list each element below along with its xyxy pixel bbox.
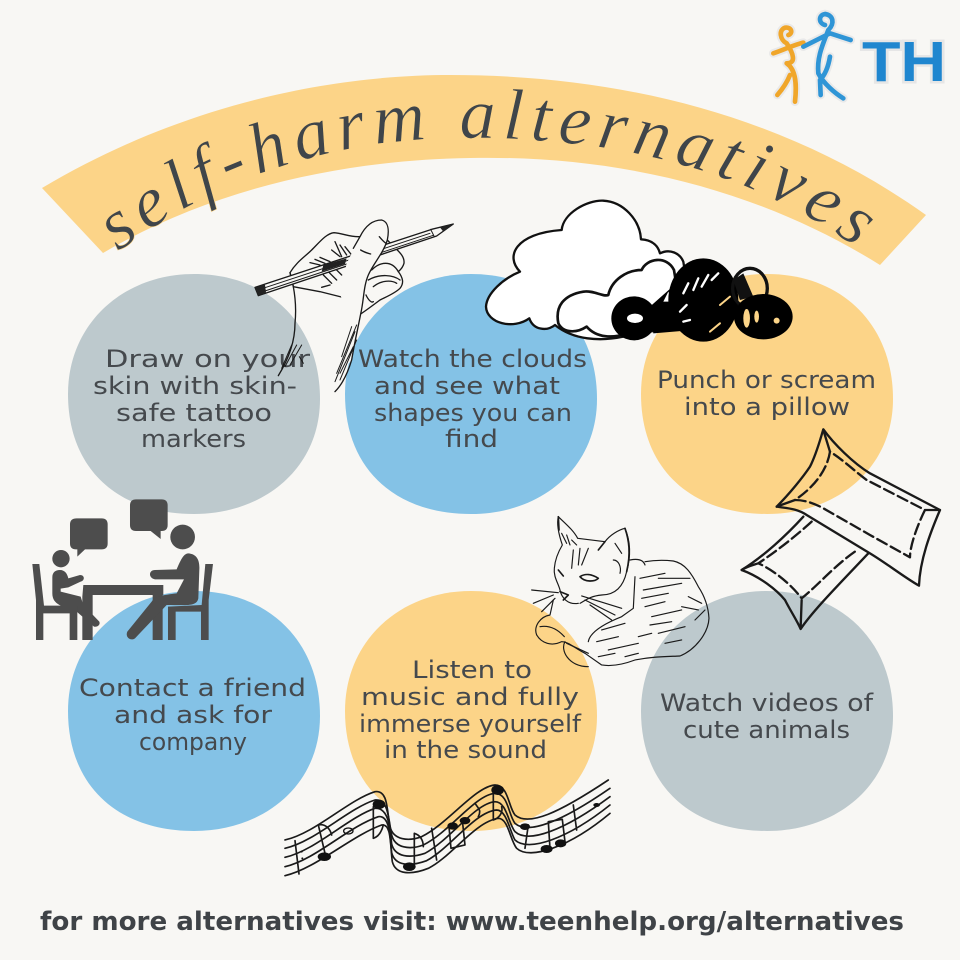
panel: draw on skin: safe tattoo: [116, 399, 272, 427]
panel: listen to music: immerse yourself: [359, 710, 582, 738]
icon: music staff: [285, 780, 610, 876]
panel: watch animal videos: [641, 591, 893, 831]
panel: listen to music: in the sound: [384, 736, 547, 764]
icon: hand holding pencil: [255, 220, 453, 392]
person right: [127, 525, 199, 639]
logo: TH: [773, 14, 946, 102]
icon: clouds with scribble: [486, 201, 793, 342]
panel: punch or scream: into a pillow: [684, 393, 850, 421]
panel: watch animal videos: cute animals: [683, 716, 850, 744]
footer link: for more alternatives visit: www.teenhelp.org/alternatives: [40, 907, 904, 937]
speech bubble right: [130, 499, 168, 539]
panel: punch or scream: [641, 274, 893, 514]
table: [82, 585, 163, 640]
panel: draw on skin: Draw on your: [105, 345, 310, 373]
icon: two people talking at a table: [32, 499, 213, 640]
banner: [42, 75, 926, 265]
panel: draw on skin: skin with skin-: [93, 372, 297, 400]
logo figures: [773, 14, 851, 102]
title: self-harm alternatives: [106, 89, 873, 250]
person left: [52, 550, 100, 627]
panel: contact a friend: and ask for: [114, 701, 272, 729]
icon: pillows: [742, 429, 940, 629]
panel: listen to music: [345, 591, 597, 831]
panel: watch animal videos: Watch videos of: [660, 689, 874, 717]
panel: contact a friend: Contact a friend: [79, 674, 306, 702]
panel: listen to music: Listen to: [412, 656, 532, 684]
speech bubble left: [70, 518, 108, 557]
panel: contact a friend: [68, 591, 320, 831]
panel: listen to music: music and fully: [361, 683, 579, 711]
logo letters: TH: [862, 30, 946, 94]
panel: punch or scream: Punch or scream: [657, 366, 876, 394]
icon: cat sketch: [532, 517, 709, 667]
panel: watch the clouds: and see what: [374, 372, 560, 400]
panel: draw on skin: [68, 274, 320, 514]
panel: contact a friend: company: [139, 728, 247, 756]
chairs: [32, 564, 213, 640]
panel: watch the clouds: [345, 274, 597, 514]
panel: watch the clouds: Watch the clouds: [358, 345, 587, 373]
panel: watch the clouds: find: [445, 425, 498, 453]
panel: watch the clouds: shapes you can: [374, 399, 572, 427]
panel: draw on skin: markers: [141, 425, 246, 453]
